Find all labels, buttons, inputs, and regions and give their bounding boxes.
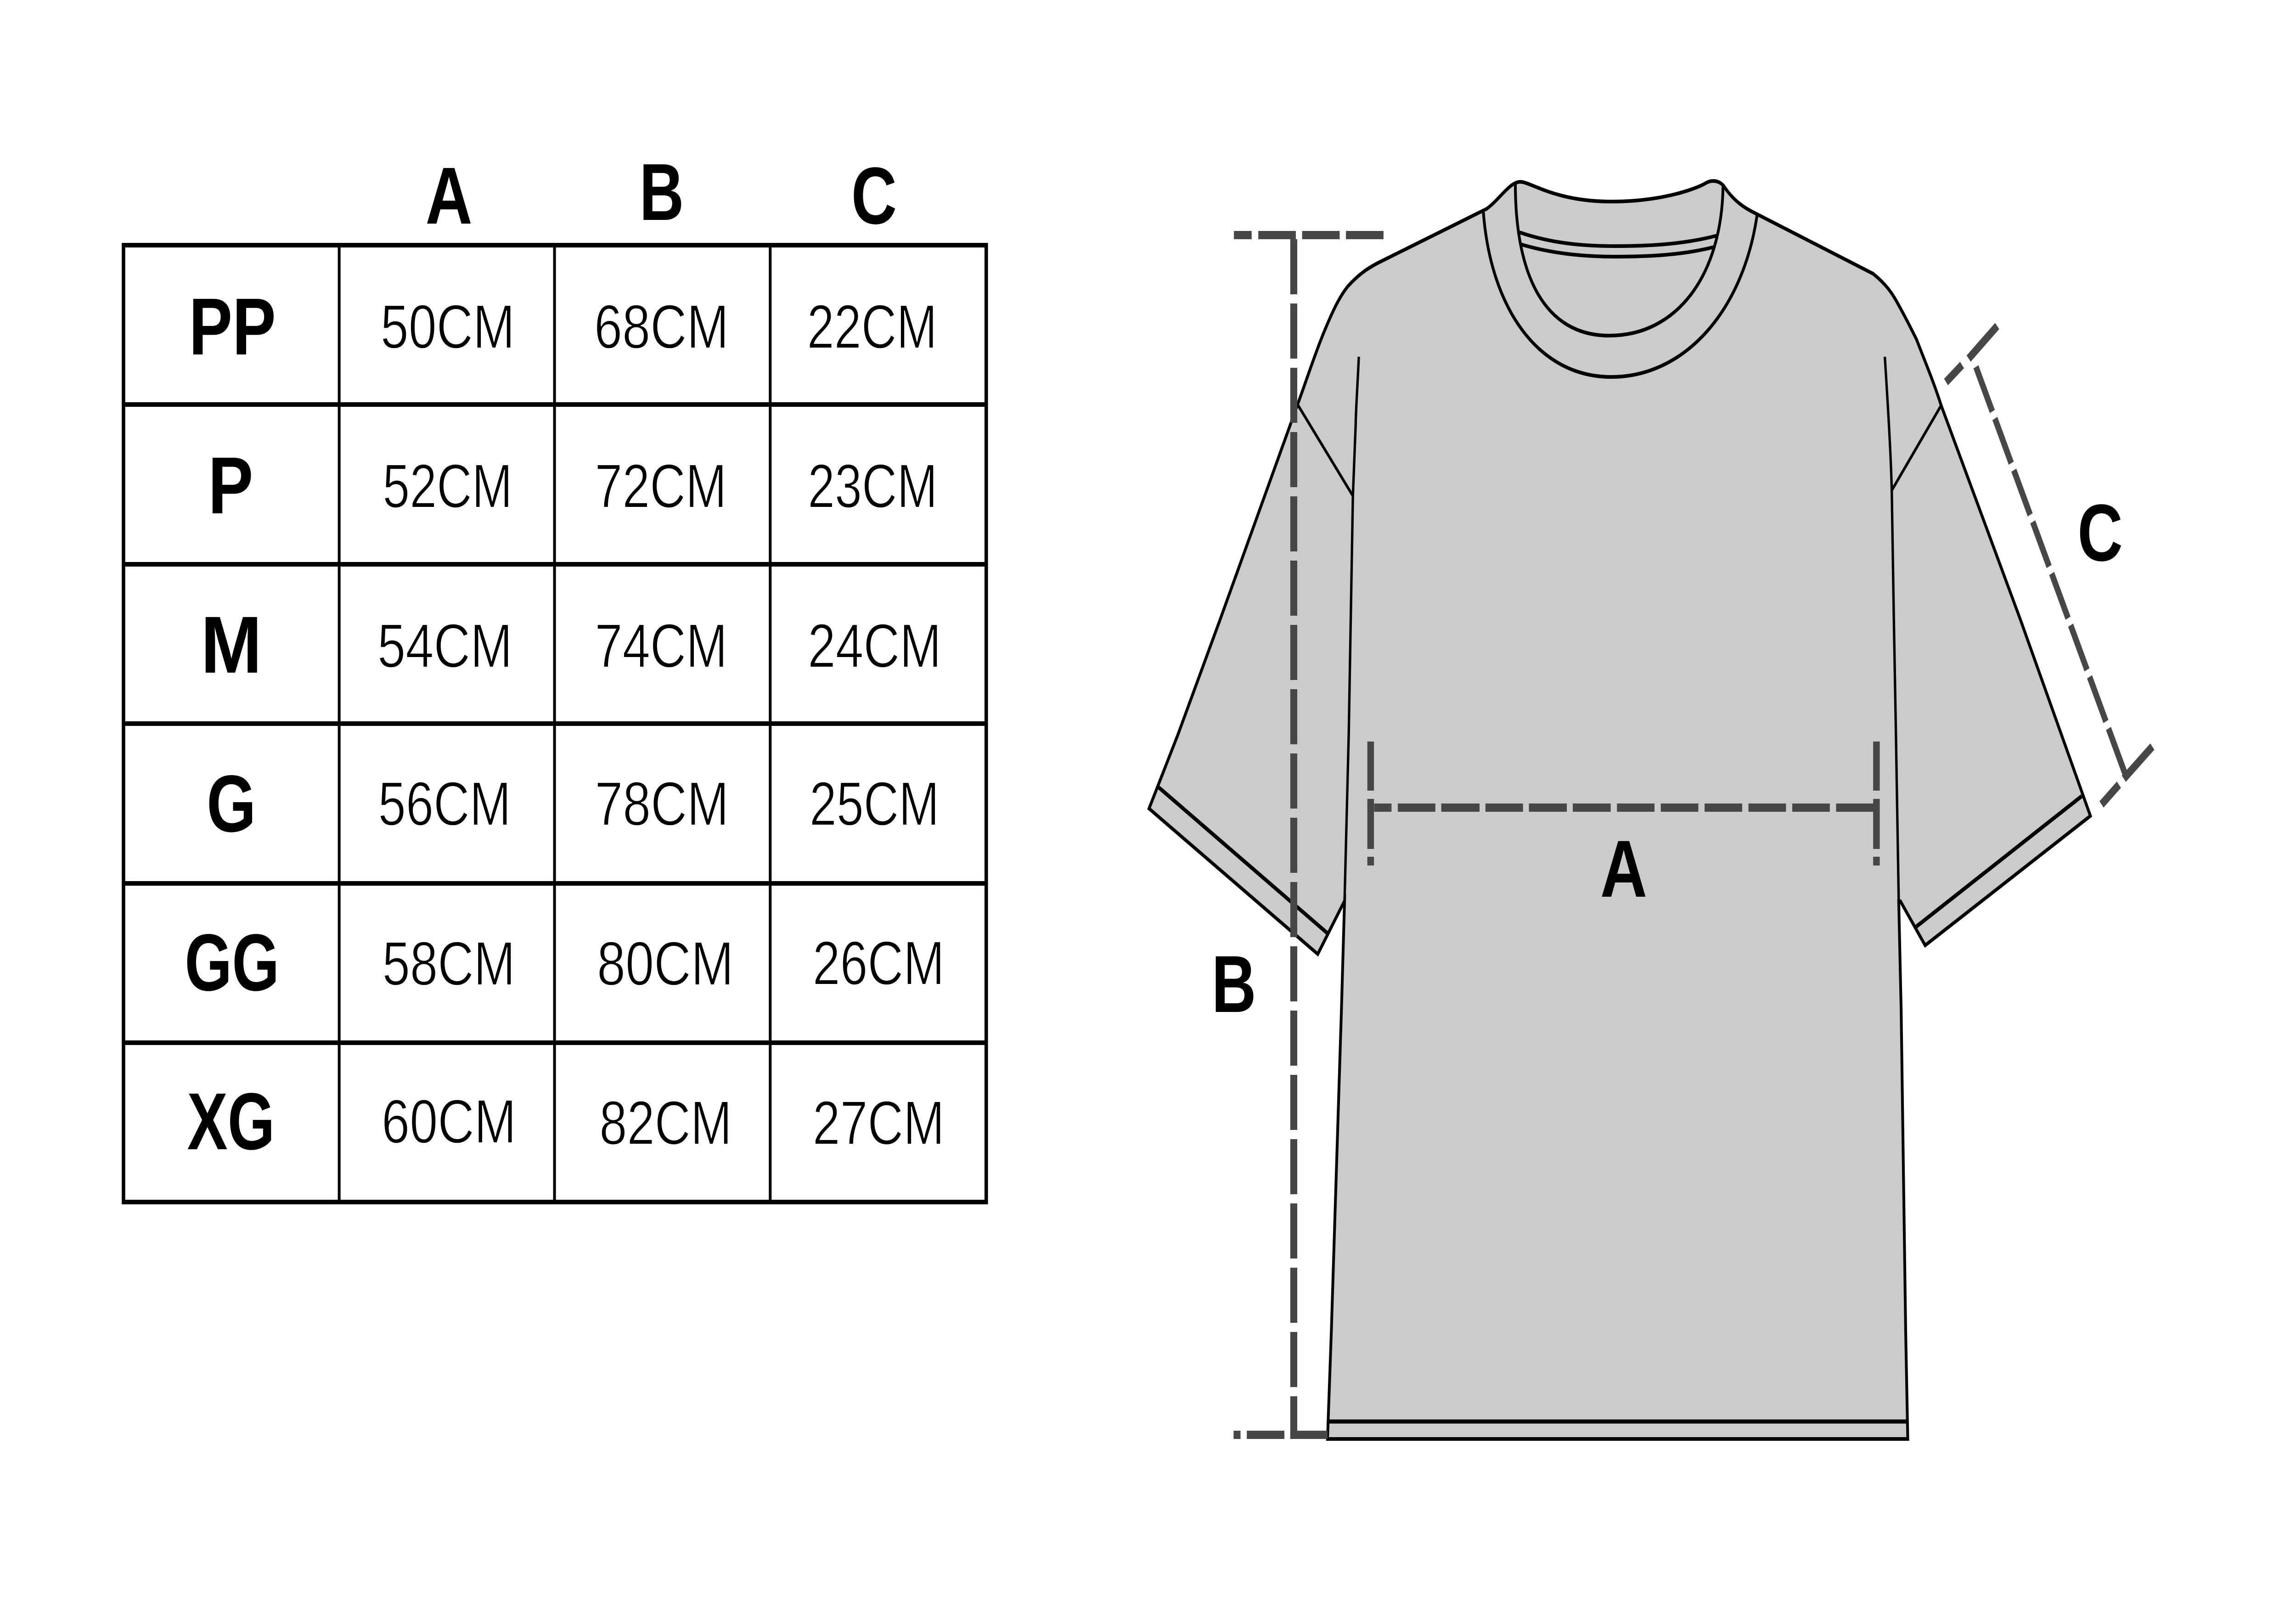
table row PP: 68CM — [594, 292, 729, 361]
table row PP: PP — [189, 282, 276, 372]
table row XG — [187, 1077, 945, 1167]
collar — [1483, 184, 1757, 377]
table row XG: XG — [187, 1077, 275, 1167]
column headers: C — [851, 151, 897, 241]
dimension B: length dashed line — [1233, 235, 1384, 1439]
dimension A: chest dashed line — [1371, 742, 1876, 865]
size table grid — [124, 245, 986, 1202]
table row XG: 60CM — [382, 1087, 516, 1156]
dimension labels — [1212, 488, 2123, 1029]
table row GG — [185, 918, 945, 1008]
table row XG: 27CM — [813, 1089, 945, 1157]
column headers: B — [639, 147, 684, 237]
column headers — [426, 147, 897, 241]
table row P: 23CM — [808, 452, 938, 521]
table row P — [208, 441, 938, 531]
table row P: 52CM — [383, 452, 512, 521]
table row M: 24CM — [808, 612, 941, 680]
table row G — [207, 759, 939, 849]
column headers: A — [426, 151, 473, 241]
dimension labels: B — [1212, 939, 1256, 1029]
table row PP: 22CM — [807, 292, 937, 361]
table row G: 78CM — [595, 770, 729, 838]
table row G: G — [207, 759, 256, 849]
table row M — [201, 600, 941, 690]
table row PP: 50CM — [381, 292, 515, 361]
table row M: M — [201, 600, 262, 690]
table row XG: 82CM — [599, 1089, 732, 1157]
dimension C: sleeve dashed line — [1946, 326, 2152, 804]
dimension labels: A — [1600, 824, 1647, 914]
table row P: P — [208, 441, 253, 531]
table row GG: 58CM — [383, 929, 515, 998]
table row GG: GG — [185, 918, 279, 1008]
t-shirt illustration — [1149, 181, 2090, 1439]
body and armhole seams — [1298, 357, 1941, 901]
table row GG: 80CM — [597, 929, 734, 998]
table row G: 25CM — [810, 770, 939, 838]
sleeve cuffs and hem — [1159, 787, 2082, 1422]
table row M: 74CM — [595, 612, 727, 680]
table row M: 54CM — [377, 612, 512, 680]
table row P: 72CM — [595, 452, 727, 521]
dimension labels: C — [2077, 488, 2123, 578]
table row PP — [189, 282, 937, 372]
shirt silhouette — [1149, 181, 2090, 1439]
table row GG: 26CM — [813, 929, 945, 998]
table row G: 56CM — [378, 770, 511, 838]
